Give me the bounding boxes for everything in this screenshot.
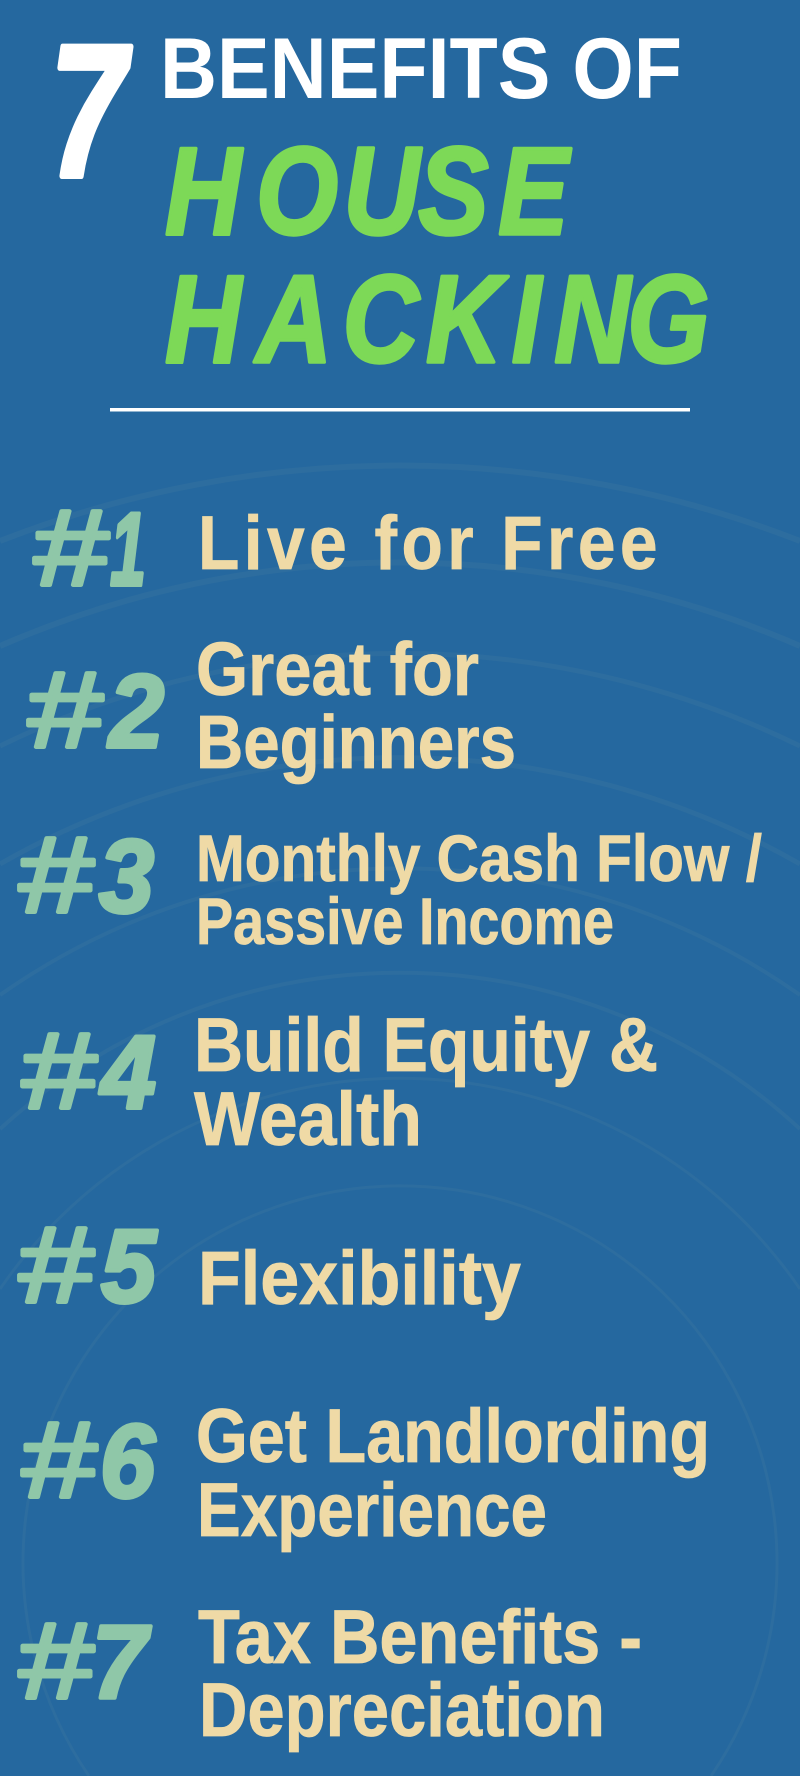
number 5: 5 xyxy=(101,1209,158,1325)
label: flexibility: Flexibility xyxy=(198,1236,521,1321)
number 6: 6 xyxy=(100,1404,156,1520)
label: great for beginners: Beginners xyxy=(196,700,516,784)
benefit 7 xyxy=(17,1595,642,1753)
number 4 xyxy=(20,1010,156,1131)
title underline xyxy=(110,408,690,412)
number 3: # xyxy=(17,814,94,935)
number 6 xyxy=(20,1399,156,1520)
number 5 xyxy=(17,1204,158,1325)
benefit 2 xyxy=(26,627,516,784)
label: get landlording experience: Get Landlording xyxy=(196,1394,710,1479)
number 7 xyxy=(17,1600,151,1721)
label: tax benefits depreciation: Tax Benefits - xyxy=(198,1595,642,1680)
title: big numeral 7: 7 xyxy=(50,6,131,216)
benefit 6 xyxy=(20,1394,710,1553)
title: hacking: HACKING xyxy=(165,251,709,389)
label: monthly cash flow / passive income xyxy=(196,821,762,958)
number 2: 2 xyxy=(107,654,164,770)
label: build equity and wealth: Wealth xyxy=(194,1077,422,1162)
number 5: # xyxy=(17,1204,94,1325)
label: great for beginners: Great for xyxy=(196,627,479,711)
label: build equity and wealth xyxy=(194,1003,658,1162)
number 1 xyxy=(32,487,146,608)
number 7: # xyxy=(17,1600,94,1721)
number 6: # xyxy=(20,1399,97,1520)
number 1: # xyxy=(32,487,109,608)
benefit 5 xyxy=(17,1204,521,1325)
number 4: # xyxy=(20,1010,97,1131)
label: monthly cash flow / passive income: Passive Income xyxy=(196,884,614,958)
number 2: # xyxy=(26,649,103,770)
title: house: HOUSE xyxy=(165,123,571,261)
number 2 xyxy=(26,649,164,770)
title: benefits of: BENEFITS OF xyxy=(160,21,682,117)
number 7: 7 xyxy=(92,1605,151,1721)
label: get landlording experience: Experience xyxy=(197,1468,547,1553)
label: great for beginners xyxy=(196,627,516,784)
number 1: 1 xyxy=(110,492,146,608)
label: live for free: Live for Free xyxy=(198,501,662,586)
title xyxy=(50,6,709,389)
benefit 1 xyxy=(32,487,662,608)
label: build equity and wealth: Build Equity & xyxy=(194,1003,658,1088)
benefit 4 xyxy=(20,1003,658,1162)
number 3: 3 xyxy=(99,819,154,935)
label: tax benefits depreciation: Depreciation xyxy=(199,1668,605,1753)
label: get landlording experience xyxy=(196,1394,710,1553)
benefit 3 xyxy=(17,814,762,958)
number 4: 4 xyxy=(99,1015,156,1131)
label: tax benefits depreciation xyxy=(198,1595,642,1753)
number 3 xyxy=(17,814,154,935)
